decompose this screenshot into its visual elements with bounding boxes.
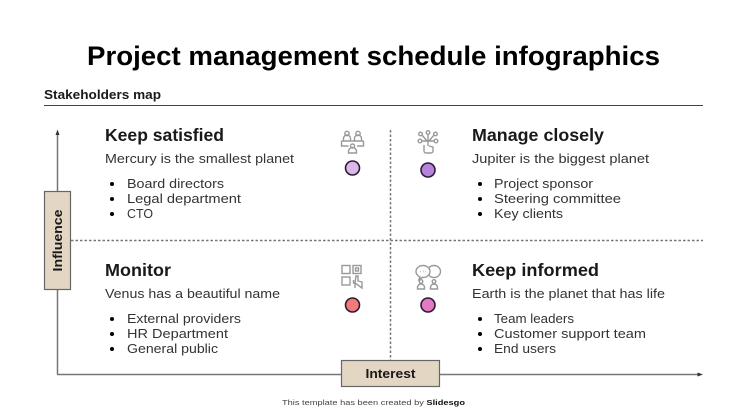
icon: speech bubbles with people xyxy=(416,266,440,289)
list: manage closely stakeholders xyxy=(478,176,621,221)
interest label xyxy=(342,360,440,386)
list: manage closely stakeholders: Key clients xyxy=(494,206,564,221)
influence label xyxy=(44,192,70,290)
icon: hand with network xyxy=(418,131,438,153)
subtitle: stakeholders map: Stakeholders map xyxy=(44,88,161,102)
heading: manage closely: Manage closely xyxy=(472,125,604,145)
list: keep satisfied stakeholders: Board directors xyxy=(127,176,225,191)
text: venus description: Venus has a beautiful name xyxy=(105,286,280,301)
vertical axis arrow xyxy=(56,130,60,374)
marker: manage closely xyxy=(421,163,435,177)
list: keep satisfied stakeholders: Legal department xyxy=(127,191,241,206)
marker: monitor xyxy=(346,298,360,312)
panel: keep satisfied xyxy=(105,125,294,221)
icon: grid with pointer hand xyxy=(342,266,362,288)
heading: keep informed: Keep informed xyxy=(472,260,599,280)
text: earth description: Earth is the planet that has life xyxy=(472,286,665,301)
list: monitor stakeholders xyxy=(110,311,242,356)
list: monitor stakeholders: HR Department xyxy=(127,326,228,341)
list: monitor stakeholders: General public xyxy=(127,341,219,356)
influence label: Influence xyxy=(51,209,65,271)
list: keep satisfied stakeholders xyxy=(110,176,241,221)
list: keep informed stakeholders: End users xyxy=(494,341,557,356)
marker: keep informed xyxy=(421,298,435,312)
text: mercury description: Mercury is the smallest planet xyxy=(105,151,294,166)
interest label: Interest xyxy=(366,367,416,381)
text: jupiter description: Jupiter is the biggest planet xyxy=(472,151,649,166)
list: manage closely stakeholders: Project sponsor xyxy=(494,176,594,191)
panel: monitor xyxy=(105,260,280,356)
list: monitor stakeholders: External providers xyxy=(127,311,242,326)
list: keep informed stakeholders xyxy=(478,311,646,356)
marker: keep satisfied xyxy=(346,161,360,175)
panel: manage closely xyxy=(472,125,649,221)
heading: monitor: Monitor xyxy=(105,260,171,280)
list: manage closely stakeholders: Steering committee xyxy=(494,191,621,206)
icon: meeting table xyxy=(342,131,364,153)
list: keep informed stakeholders: Customer support team xyxy=(494,326,646,341)
panel: keep informed xyxy=(472,260,665,356)
title: Project management schedule infographics xyxy=(87,41,660,71)
footer credit: This template has been created by Slidesgo xyxy=(282,398,466,407)
heading: keep satisfied: Keep satisfied xyxy=(105,125,224,145)
horizontal axis arrow xyxy=(57,372,703,376)
list: keep informed stakeholders: Team leaders xyxy=(494,311,575,326)
list: keep satisfied stakeholders: CTO xyxy=(127,206,153,221)
